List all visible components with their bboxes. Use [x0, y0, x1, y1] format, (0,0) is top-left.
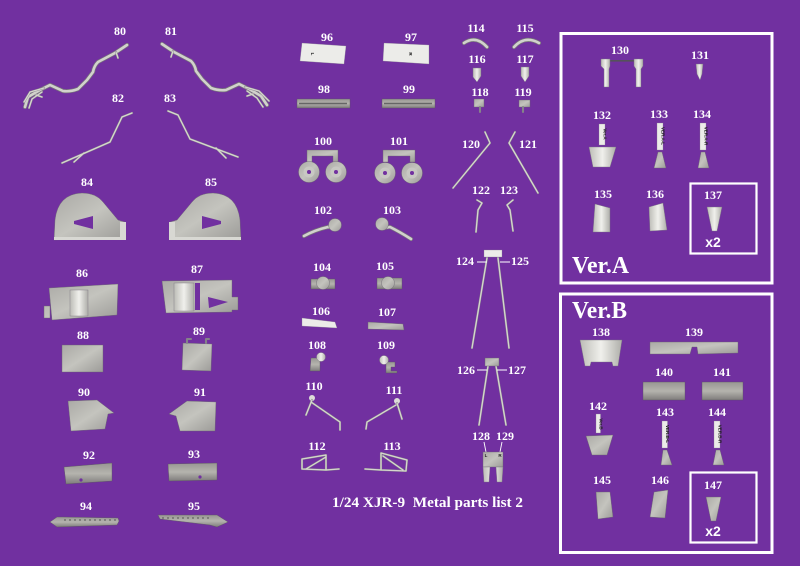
part 111: wishbone: [366, 383, 402, 429]
part 132: Ver.A: [602, 128, 608, 140]
part 134: 134: [693, 107, 711, 121]
part 121: rod: [509, 132, 538, 193]
part 101: brake discs R: 101: [390, 134, 408, 148]
part 139: 139: [685, 325, 703, 339]
part 133: 133: [650, 107, 668, 121]
part 101: brake discs R: [374, 134, 422, 184]
part 105: hub: [376, 259, 402, 290]
part 143: 143: [656, 405, 674, 419]
part 147 box: x2: [705, 523, 721, 539]
parts 128 and 129: L/R fork: 129: [496, 429, 514, 443]
part 85: side plate: [169, 175, 241, 240]
part 87: panel: 87: [191, 262, 203, 276]
part 116: clip: [468, 52, 486, 82]
part 122: strut: [472, 183, 490, 232]
part 96: plate L: 96: [321, 30, 333, 44]
part 98: bar L: [297, 82, 350, 108]
part 137 box: [690, 184, 756, 254]
part 96: plate L: L: [310, 53, 315, 56]
part 100: brake discs L: [298, 134, 346, 182]
parts 124 and 125: long rods: 125: [511, 254, 529, 268]
part 81: exhaust pipe: [162, 24, 269, 107]
part 114: arch: 114: [467, 21, 485, 35]
part 94: bar: 94: [80, 499, 92, 513]
part 105: hub: 105: [376, 259, 394, 273]
part 131: [691, 48, 709, 80]
heading: Ver.A: Ver.A: [572, 253, 630, 279]
part 106: arm: [302, 304, 337, 328]
part 99: bar R: [382, 82, 435, 108]
part 111: wishbone: 111: [386, 383, 402, 397]
part 93: cover: [168, 447, 217, 481]
part 139: [650, 325, 738, 354]
part 83: tail pipe: [164, 91, 238, 158]
parts 128 and 129: L/R fork: 128: [472, 429, 490, 443]
part 135: 135: [594, 187, 612, 201]
part 144: 144: [708, 405, 726, 419]
part 142: [586, 399, 613, 455]
part 89: panel: 89: [193, 324, 205, 338]
part 132: [589, 108, 616, 167]
part 87: panel: [162, 262, 238, 313]
part 86: panel: 86: [76, 266, 88, 280]
part 138: [580, 325, 622, 366]
part 147 box: [690, 472, 756, 542]
part 140: 140: [655, 365, 673, 379]
part 109: bracket: [377, 338, 397, 373]
part 89: panel: [182, 324, 212, 371]
part 145: 145: [593, 473, 611, 487]
part 130: 130: [611, 43, 629, 57]
part 146: 146: [651, 473, 669, 487]
part 133: VER.A-L: [660, 127, 666, 145]
column: suspension parts: [297, 30, 435, 471]
part 108: bracket: [308, 338, 326, 371]
part 104: hub: 104: [313, 260, 331, 274]
part 131: 131: [691, 48, 709, 62]
part 110: wishbone: 110: [305, 379, 323, 393]
part 114: arch: [464, 21, 487, 47]
title: 1/24 XJR-9 Metal parts list 2: [332, 495, 523, 511]
parts 126 and 127: short rods: 126: [457, 363, 475, 377]
part 84: side plate: 84: [81, 175, 93, 189]
parts 126 and 127: short rods: 127: [508, 363, 526, 377]
part 112: frame: 112: [308, 439, 326, 453]
part 115: arch: [514, 21, 539, 47]
part 133: [650, 107, 668, 168]
part 142: Ver.B: [598, 418, 604, 430]
part 102: upright: 102: [314, 203, 332, 217]
part 107: arm: [368, 305, 404, 330]
parts 124 and 125: long rods: 124: [456, 254, 474, 268]
part 132: 132: [593, 108, 611, 122]
parts 128 and 129: L/R fork: R: [498, 453, 502, 458]
part 141: [702, 365, 743, 400]
parts 126 and 127: short rods: [457, 358, 526, 425]
part 118: tab: 118: [471, 85, 489, 99]
column: rods and struts: [453, 21, 539, 482]
part 134: VER.A-R: [704, 127, 708, 146]
part 119: tab: 119: [514, 85, 532, 99]
part 117: clip: 117: [516, 52, 534, 66]
part 144: [708, 405, 726, 465]
part 119: tab: [514, 85, 532, 112]
part 140: [643, 365, 685, 400]
part 115: arch: 115: [516, 21, 534, 35]
part 143: VER.B-L: [665, 425, 670, 443]
parts 128 and 129: L/R fork: L: [485, 453, 488, 458]
part 84: side plate: [54, 175, 126, 240]
parts 124 and 125: long rods: [456, 250, 529, 348]
part 103: upright: [376, 203, 411, 239]
part 97: plate R: [383, 30, 429, 64]
part 144: VER.B-R: [718, 425, 722, 444]
part 95: bar: 95: [188, 499, 200, 513]
part 104: hub: [311, 260, 335, 290]
part 92: cover: [64, 448, 112, 484]
part 93: cover: 93: [188, 447, 200, 461]
column: exhaust and body panels: [24, 24, 269, 527]
panel: Ver.A: [561, 34, 772, 283]
part 82: tail pipe: [62, 91, 132, 163]
part 141: 141: [713, 365, 731, 379]
part 122: strut: 122: [472, 183, 490, 197]
part 91: panel: [169, 385, 216, 431]
part 91: panel: 91: [194, 385, 206, 399]
part 94: bar: [50, 499, 119, 527]
part 123: strut: 123: [500, 183, 518, 197]
part 143: [656, 405, 674, 465]
part 99: bar R: 99: [403, 82, 415, 96]
part 95: bar: [158, 499, 228, 527]
part 121: rod: 121: [519, 137, 537, 151]
part 138: 138: [592, 325, 610, 339]
part 113: frame: 113: [383, 439, 401, 453]
part 80: exhaust pipe: 80: [114, 24, 126, 38]
part 97: plate R: 97: [405, 30, 417, 44]
part 80: exhaust pipe: [24, 24, 127, 108]
part 107: arm: 107: [378, 305, 396, 319]
part 100: brake discs L: 100: [314, 134, 332, 148]
part 113: frame: [365, 439, 407, 471]
part 90: panel: 90: [78, 385, 90, 399]
part 116: clip: 116: [468, 52, 486, 66]
part 90: panel: [68, 385, 114, 431]
part 108: bracket: 108: [308, 338, 326, 352]
part 85: side plate: 85: [205, 175, 217, 189]
part 137 box: x2: [705, 234, 721, 250]
part 92: cover: 92: [83, 448, 95, 462]
part 83: tail pipe: 83: [164, 91, 176, 105]
part 110: wishbone: [305, 379, 340, 430]
part 146: [650, 473, 669, 518]
heading: Ver.B: Ver.B: [572, 298, 627, 324]
part 134: [693, 107, 711, 168]
part 137 box: 137: [704, 188, 722, 202]
part 147 box: 147: [704, 478, 722, 492]
part 145: [593, 473, 613, 519]
part 130: [601, 43, 643, 87]
part 109: bracket: 109: [377, 338, 395, 352]
part 120: rod: [453, 132, 490, 188]
part 135: [593, 187, 612, 232]
part 112: frame: [302, 439, 339, 470]
part 123: strut: [500, 183, 518, 231]
part 136: 136: [646, 187, 664, 201]
part 117: clip: [516, 52, 534, 82]
part 142: 142: [589, 399, 607, 413]
part 88: panel: [62, 328, 103, 372]
part 81: exhaust pipe: 81: [165, 24, 177, 38]
part 88: panel: 88: [77, 328, 89, 342]
panel: Ver.B: [560, 294, 772, 552]
part 96: plate L: [300, 30, 346, 64]
part 120: rod: 120: [462, 137, 480, 151]
parts 128 and 129: L/R fork: [472, 429, 514, 482]
part 82: tail pipe: 82: [112, 91, 124, 105]
part 103: upright: 103: [383, 203, 401, 217]
part 86: panel: [44, 266, 118, 320]
part 118: tab: [471, 85, 489, 112]
part 106: arm: 106: [312, 304, 330, 318]
part 136: [646, 187, 667, 231]
part 102: upright: [304, 203, 342, 236]
part 98: bar L: 98: [318, 82, 330, 96]
part 97: plate R: R: [408, 52, 413, 56]
